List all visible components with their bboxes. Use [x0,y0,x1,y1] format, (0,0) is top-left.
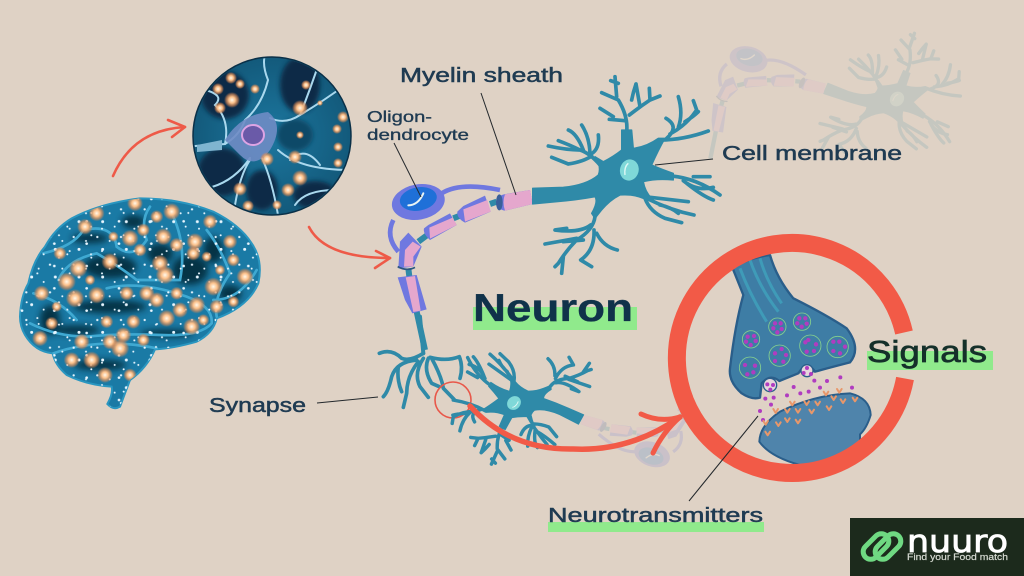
vesicle contents [743,316,847,376]
leader lines [317,93,758,501]
receptors [763,389,857,435]
red signal arrow [470,406,680,453]
label: Synapse: Synapse [209,395,306,417]
lower neuron faded myelin [581,395,693,468]
circular neuron closeup image [193,55,351,215]
axon terminal: synapse branches [379,317,462,407]
postsynaptic terminal [759,393,871,465]
vesicles [739,313,848,378]
label highlight: Neurotransmitters [548,522,764,532]
title: Neuron: Neuron [473,287,633,330]
label: Signals: Signals [867,334,987,369]
synapse closeup [730,255,871,465]
arrow: closeup to neuron [309,227,390,268]
label: Neurotransmitters: Neurotransmitters [548,505,763,527]
label highlight: Signals [867,351,993,370]
main neuron with myelinated axon [389,77,720,350]
label: Oligodendrocyte: dendrocyte [367,127,469,144]
logo: nuuro [850,518,1024,576]
neurotransmitter dots [758,366,854,422]
label: Oligodendrocyte [367,109,469,144]
faded neuron, upper right [687,0,984,244]
presynaptic terminal [730,255,855,398]
axon stripes [740,258,782,322]
logo icon [860,531,904,562]
small red circle on synapse [435,382,471,418]
logo tagline: Find your Food match [907,552,1008,563]
lower neuron [428,310,607,492]
vesicle release bulbs [763,365,813,392]
label: Myelin sheath: Myelin sheath [400,65,563,87]
arrow: brain to neuron closeup [113,120,185,176]
label: Oligodendrocyte: Oligon- [367,109,432,126]
label highlight: Neuron [473,307,637,330]
callout circle: signals [677,243,905,473]
label: Cell membrane: Cell membrane [722,143,902,165]
brain illustration [17,193,267,413]
logo wordmark: nuuro [907,524,1008,560]
